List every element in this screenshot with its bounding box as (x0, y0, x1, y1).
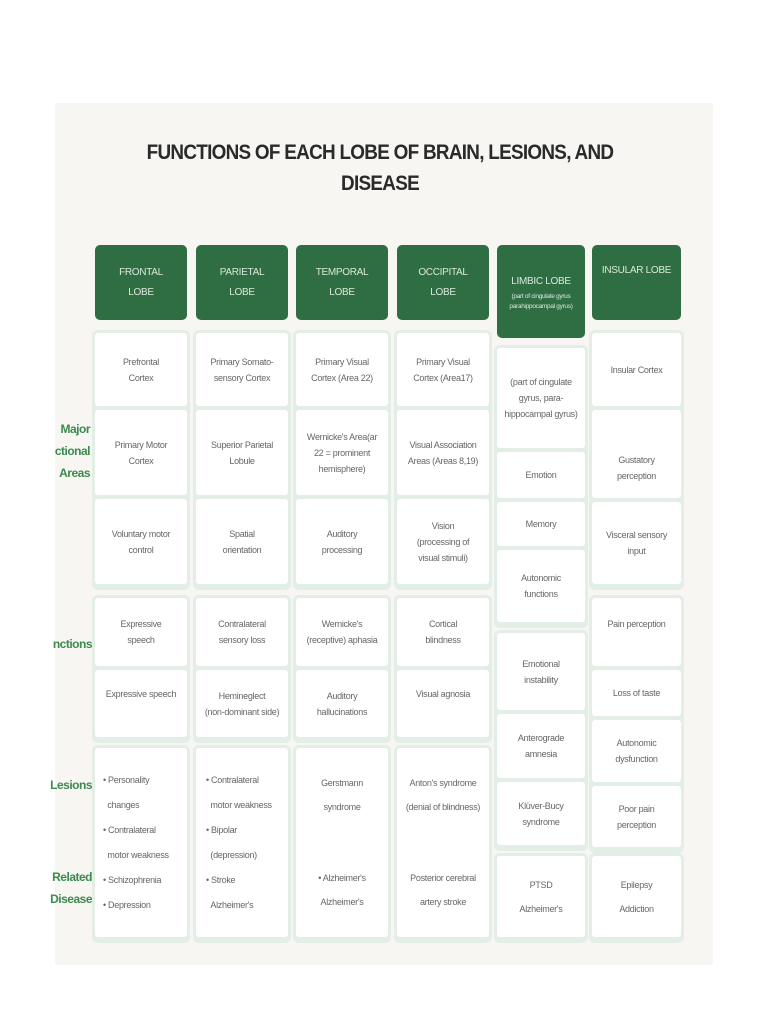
text: motor weakness (107, 850, 169, 860)
header: parietal: PARIETAL (220, 266, 264, 278)
text: hallucinations (317, 706, 367, 716)
text: 22 = prominent (314, 448, 370, 458)
header: parietal: LOBE (229, 286, 255, 298)
text: Cortical (429, 619, 457, 629)
text: motor weakness (210, 800, 272, 810)
text: Spatial (229, 528, 255, 538)
header: limbic (497, 245, 585, 338)
title: FUNCTIONS OF EACH LOBE OF BRAIN, LESIONS, AND (147, 141, 613, 164)
column: insular (589, 330, 684, 943)
text: Areas (Areas 8,19) (408, 456, 478, 466)
text: syndrome (522, 816, 560, 826)
column: occipital (394, 330, 492, 943)
text: Gerstmann (321, 778, 363, 788)
text: control (129, 544, 153, 554)
text: • Contralateral (206, 774, 259, 784)
text: Epilepsy (621, 880, 652, 890)
group: frontal lesions & disease (92, 745, 190, 943)
group: frontal areas (92, 330, 190, 590)
text: Primary Visual (416, 356, 470, 366)
column: parietal (193, 330, 291, 943)
header: frontal: LOBE (128, 286, 154, 298)
row label: major functional areas (55, 422, 90, 480)
header: temporal: LOBE (329, 286, 355, 298)
text: hemisphere) (319, 464, 365, 474)
text: Cortex (129, 456, 153, 466)
text: • Contralateral (103, 824, 156, 834)
row label: lesions: Lesions (50, 778, 92, 792)
header: limbic: parahippocampal gyrus) (509, 302, 573, 310)
row label: related disease: Disease (50, 892, 92, 906)
background panel (55, 103, 713, 965)
header: limbic: (part of cingulate gyrus (512, 292, 570, 300)
column: limbic (494, 345, 588, 943)
text: amnesia (525, 749, 557, 759)
text: Vision (432, 520, 454, 530)
text: gyrus, para- (519, 393, 563, 403)
text: sensory Cortex (214, 372, 270, 382)
text: Autonomic (617, 738, 656, 748)
text: Alzheimer's (321, 897, 363, 907)
text: Wernicke's (322, 619, 362, 629)
text: processing (322, 544, 362, 554)
text: Alzheimer's (520, 904, 562, 914)
text: Prefrontal (123, 356, 159, 366)
header: temporal (296, 245, 388, 320)
header: insular (592, 245, 681, 320)
text: Cortex (129, 372, 153, 382)
text: functions (524, 589, 558, 599)
text: • Stroke (206, 874, 235, 884)
text: Voluntary motor (112, 528, 170, 538)
text: Auditory (327, 690, 357, 700)
text: Gustatory (618, 455, 655, 465)
text: (depression) (210, 850, 257, 860)
title: DISEASE (341, 172, 419, 195)
text: Loss of taste (613, 688, 660, 698)
text: perception (617, 471, 656, 481)
text: changes (107, 800, 139, 810)
header: occipital: OCCIPITAL (418, 266, 468, 278)
column: frontal (92, 330, 190, 943)
text: Anterograde (518, 733, 564, 743)
text: Wernicke's Area(ar (307, 432, 377, 442)
row label: related disease: Related (52, 870, 92, 884)
text: (denial of blindness) (406, 802, 480, 812)
text: Contralateral (218, 619, 266, 629)
text: Auditory (327, 528, 357, 538)
text: Primary Motor (115, 440, 167, 450)
text: Visual Association (410, 440, 476, 450)
text: speech (127, 635, 155, 645)
text: • Schizophrenia (103, 874, 161, 884)
text: instability (524, 674, 558, 684)
header: frontal (95, 245, 187, 320)
text: • Bipolar (206, 824, 237, 834)
text: Cortex (Area17) (413, 372, 473, 382)
text: hippocampal gyrus) (504, 409, 578, 419)
text: (part of cingulate (510, 377, 572, 387)
header: insular: INSULAR LOBE (602, 265, 671, 276)
text: Hemineglect (219, 690, 265, 700)
text: Poor pain (619, 804, 654, 814)
header: parietal (196, 245, 288, 320)
text: Visceral sensory (606, 530, 667, 540)
text: input (627, 546, 646, 556)
row label: functions: nctions (53, 637, 92, 651)
text: Anton's syndrome (410, 778, 476, 788)
text: Pain perception (607, 619, 666, 629)
text: orientation (223, 544, 261, 554)
row label: related disease (50, 870, 92, 906)
text: artery stroke (420, 897, 466, 907)
text: (processing of (417, 536, 469, 546)
text: Visual agnosia (416, 689, 470, 699)
text: blindness (425, 635, 461, 645)
text: Emotional (522, 658, 560, 668)
text: Alzheimer's (210, 900, 253, 910)
text: • Personality (103, 774, 149, 784)
text: sensory loss (219, 635, 265, 645)
text: syndrome (323, 802, 361, 812)
text: Autonomic (521, 573, 561, 583)
text: visual stimuli) (418, 552, 468, 562)
row label: major functional areas: Areas (59, 466, 90, 480)
group: frontal functions (92, 595, 190, 743)
text: (receptive) aphasia (307, 635, 377, 645)
text: Klüver-Bucy (518, 800, 564, 810)
text: perception (617, 820, 656, 830)
text: Addiction (619, 904, 654, 914)
row label: major functional areas: ctional (55, 444, 90, 458)
text: PTSD (530, 880, 552, 890)
text: Primary Visual (315, 356, 369, 366)
text: (non-dominant side) (205, 706, 279, 716)
text: Superior Parietal (211, 440, 273, 450)
header: occipital: LOBE (430, 286, 456, 298)
text: • Depression (103, 900, 151, 910)
header: limbic: LIMBIC LOBE (511, 276, 571, 286)
text: Insular Cortex (611, 364, 662, 374)
text: Lobule (229, 456, 255, 466)
header: frontal: FRONTAL (119, 266, 163, 278)
text: Expressive (120, 619, 162, 629)
text: Expressive speech (106, 689, 176, 699)
text: Memory (526, 519, 556, 529)
text: Primary Somato- (210, 356, 274, 366)
text: dysfunction (615, 754, 658, 764)
text: Cortex (Area 22) (311, 372, 373, 382)
title (147, 141, 614, 195)
text: Emotion (526, 470, 556, 480)
header: temporal: TEMPORAL (316, 266, 368, 278)
text: Posterior cerebral (410, 873, 476, 883)
column: temporal (293, 330, 391, 943)
row label: major functional areas: Major (60, 422, 90, 436)
header: occipital (397, 245, 489, 320)
text: • Alzheimer's (318, 873, 366, 883)
